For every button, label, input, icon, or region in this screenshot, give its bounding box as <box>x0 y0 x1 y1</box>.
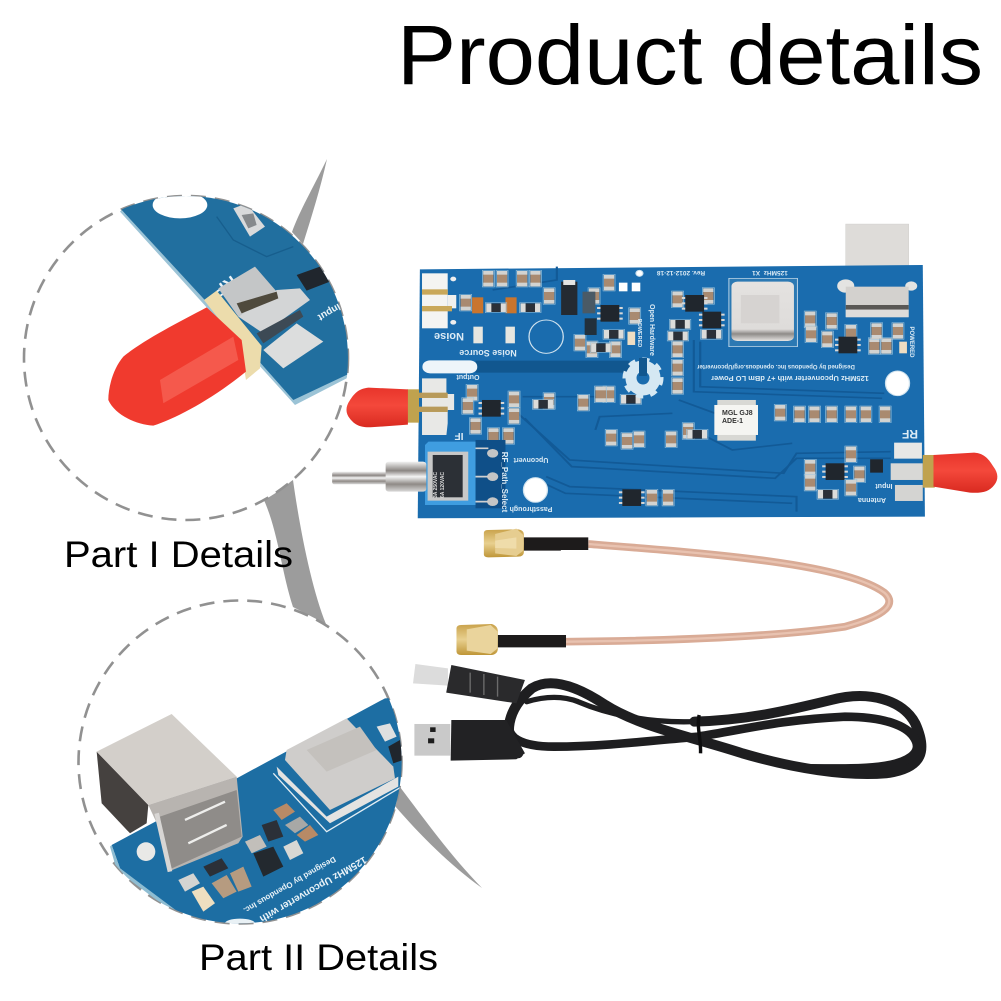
callout pointer: upper wedge to Part I circle <box>292 159 327 244</box>
inset label Input: Input <box>315 301 342 323</box>
board silkscreen labels: RF_Path_Select <box>500 452 509 513</box>
board silkscreen labels: POWERED <box>908 326 914 358</box>
dashed magnifier circle I <box>24 196 348 520</box>
board silkscreen labels <box>433 269 918 513</box>
inset traces <box>217 217 293 257</box>
board silkscreen labels: Passthrough <box>510 505 552 512</box>
board silkscreen labels: 6A 120VAC <box>440 471 446 498</box>
PCB darker ground plane strip <box>476 361 630 373</box>
title: Product details <box>397 8 983 102</box>
open hardware gear logo <box>625 358 661 396</box>
USB type-B plug <box>413 664 525 703</box>
toggle switch <box>332 440 505 508</box>
inset LED component <box>233 203 265 237</box>
inset diode chip <box>297 267 330 291</box>
inset solder pads <box>218 267 323 368</box>
right RF SMA connector <box>891 443 997 501</box>
board silkscreen labels: 125MHz Upconverter with +7 dBm LO Power <box>711 374 869 383</box>
label: Part II Details: Part II Details <box>199 937 438 978</box>
callout pointer: crescent linking Part I and Part II circles <box>263 480 326 624</box>
board silkscreen labels: Designed by Opendous Inc. opendous.org/Upconverter <box>696 363 855 369</box>
USB-B connector front <box>837 279 917 317</box>
inset SMD components <box>178 723 403 912</box>
inset red cap <box>108 307 246 426</box>
board silkscreen labels: Rev. 2012-12-18 <box>656 269 705 276</box>
board silkscreen labels: Antenna <box>858 496 886 503</box>
crystal oscillator <box>729 278 797 347</box>
coax jacket highlight <box>566 544 889 642</box>
inset PCB bevel edge <box>120 210 350 405</box>
inset label RF: RF <box>211 272 240 300</box>
board silkscreen labels: Input <box>875 482 893 489</box>
inset silkscreen lines: 125MHz Upconverter with <box>258 854 368 924</box>
board silkscreen labels: MGL GJ8 <box>722 410 753 417</box>
USB cable with type-A and type-B plugs <box>413 664 921 774</box>
zoomed board corner with USB socket and crystal <box>97 697 413 930</box>
inset PCB body <box>122 193 353 403</box>
inset crystal can <box>273 718 402 832</box>
board silkscreen labels: Noise <box>434 330 464 342</box>
inset red cap highlight <box>160 337 238 403</box>
inset silkscreen lines: Designed by Opendous Inc. <box>242 855 337 915</box>
panel: Part I detail inset <box>24 192 353 520</box>
PCB body <box>418 265 925 518</box>
panel: main upconverter circuit board <box>332 224 997 518</box>
lower SMA plug <box>456 624 566 655</box>
inset mounting hole <box>225 918 255 924</box>
mixer chip <box>714 400 758 441</box>
cable tie <box>698 715 701 753</box>
board silkscreen labels: POWERED <box>636 319 642 347</box>
board silkscreen labels: ADE-1 <box>722 418 743 425</box>
upper SMA plug <box>484 529 588 557</box>
inset PCB body <box>112 697 413 930</box>
board silkscreen labels: Noise Source <box>459 348 517 358</box>
board silkscreen labels: Output <box>456 373 479 380</box>
inset USB socket <box>97 714 243 872</box>
board silkscreen labels: 125MHz X1 <box>752 269 788 276</box>
panel: Part II detail inset <box>78 600 413 930</box>
inset gold collar <box>204 291 262 380</box>
board silkscreen labels: 3A 250VAC <box>433 471 439 498</box>
dashed magnifier circle II <box>78 600 402 924</box>
coaxial RF cable <box>456 529 889 655</box>
board silkscreen labels: RF <box>902 427 918 441</box>
cable loops <box>509 683 921 774</box>
board silkscreen labels: IF <box>455 430 463 441</box>
USB type-A plug <box>414 720 525 761</box>
PCB copper traces <box>493 267 891 512</box>
inset PCB bevel edge <box>110 845 176 910</box>
board silkscreen labels: Upconvert <box>513 456 548 463</box>
callout pointer: lower wedge from Part II circle <box>395 787 482 888</box>
mounting holes <box>523 270 910 502</box>
coax jacket <box>566 544 889 642</box>
inset mounting hole <box>152 196 208 218</box>
label: Part I Details: Part I Details <box>64 534 293 575</box>
board silkscreen labels: Open Hardware <box>648 304 655 356</box>
PCB slot <box>422 360 477 373</box>
noise source header <box>422 273 456 328</box>
USB-B connector rear housing <box>846 224 909 289</box>
SMD components <box>460 270 907 506</box>
left output SMA connector <box>346 378 454 435</box>
zoomed board corner with red SMA connector <box>108 192 353 426</box>
